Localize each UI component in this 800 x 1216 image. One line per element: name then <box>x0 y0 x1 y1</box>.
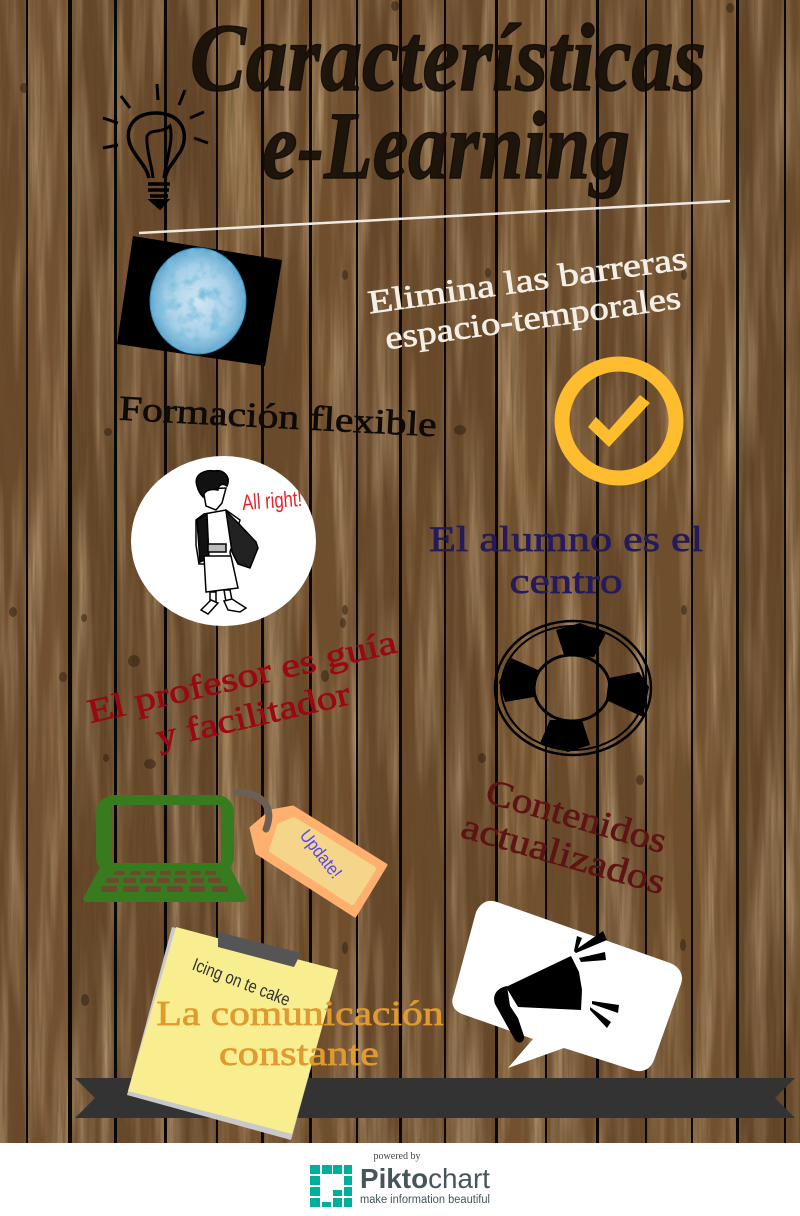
divider line <box>139 201 730 233</box>
dark ribbon banner <box>75 1078 795 1118</box>
icon: light bulb <box>103 84 208 209</box>
piktochart tagline: make information beautiful <box>360 1194 490 1206</box>
piktochart wordmark: Piktochart <box>360 1163 490 1194</box>
tag string <box>236 792 269 829</box>
yellow sticky note <box>127 927 338 1140</box>
icon: megaphone speech bubble <box>452 901 682 1071</box>
icon: life ring <box>495 621 651 755</box>
text: contenidos actualizados: actualizados <box>457 806 670 902</box>
text: el alumno es el centro: centro <box>510 561 622 601</box>
note tape <box>218 932 301 967</box>
text: la comunicación constante: La comunicación <box>156 994 444 1033</box>
text: la comunicación constante: constante <box>219 1034 379 1073</box>
title: e-Learning <box>262 92 630 199</box>
label: all right: All right! <box>241 486 303 515</box>
text: elimina las barreras: Elimina las barreras <box>366 241 690 321</box>
planet <box>150 248 246 354</box>
text: contenidos actualizados <box>457 767 681 902</box>
piktochart logo mark <box>310 1165 352 1207</box>
title <box>190 4 706 199</box>
text: formación flexible: Formación flexible <box>118 389 438 444</box>
student figure <box>196 471 258 614</box>
text: el profesor es guía y facilitador: y facilitador <box>152 675 354 756</box>
footer <box>0 1143 800 1216</box>
text: el profesor es guía y facilitador <box>84 624 409 770</box>
illustration: student in white circle <box>131 456 316 626</box>
icon: green laptop <box>83 795 247 902</box>
icon: update tag <box>236 792 386 916</box>
text: la comunicación constante <box>156 994 444 1073</box>
text: contenidos actualizados: Contenidos <box>482 771 671 861</box>
megaphone <box>494 931 619 1043</box>
laptop keyboard <box>101 871 228 892</box>
text: el alumno es el centro: El alumno es el <box>429 519 703 559</box>
note handwriting: Icing on te cake <box>190 954 293 1010</box>
image: planet photo <box>117 236 282 366</box>
text: elimina las barreras <box>366 241 695 359</box>
powered by label: powered by <box>374 1150 421 1162</box>
text: el profesor es guía y facilitador: El profesor es guía <box>84 624 400 731</box>
text: el alumno es el centro <box>429 519 703 601</box>
text: elimina las barreras: espacio-temporales <box>383 280 683 357</box>
title: Características <box>190 4 706 111</box>
icon: check circle <box>562 364 676 478</box>
tag label: Update! <box>296 826 346 882</box>
